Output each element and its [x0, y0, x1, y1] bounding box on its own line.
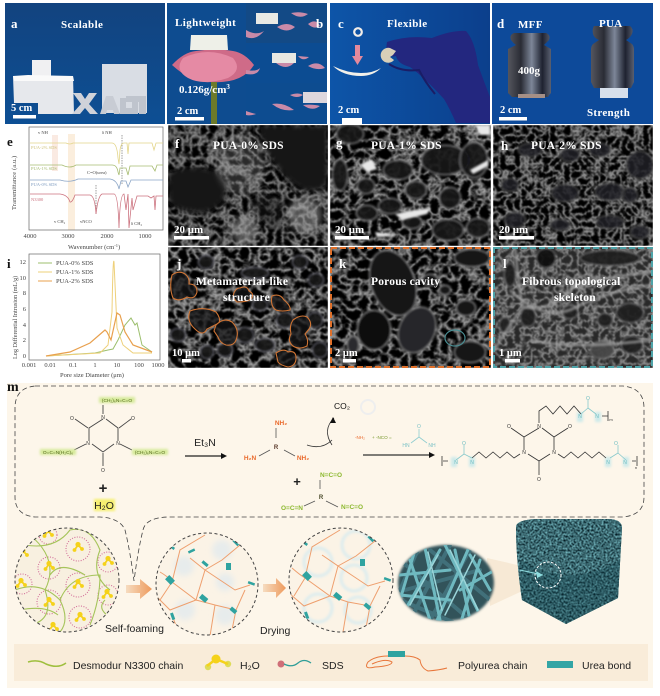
urea formula [355, 424, 436, 458]
peak annotations: v CH₂ [54, 219, 66, 224]
axis ticks: 6 [23, 306, 27, 313]
polymer product: N [606, 460, 610, 466]
panel a: scalable foams photo [5, 3, 165, 124]
labels: g [336, 135, 343, 150]
axis title and ticks: Transmittance (a.u.) [11, 156, 18, 210]
axis ticks [20, 259, 27, 360]
axis ticks: 8 [23, 290, 26, 297]
legend bar [14, 644, 648, 681]
panel h: SEM PUA-2%: PUA-2% SDS [531, 140, 602, 152]
polymer product: N [522, 450, 526, 456]
panel f: SEM PUA-0%: PUA-0% SDS [213, 140, 284, 152]
amine molecule: H₂N [244, 455, 256, 462]
chart e: FTIR spectra: e [7, 134, 13, 149]
axis ticks: 0 [23, 353, 26, 360]
axis ticks: 4 [23, 322, 27, 329]
label and title: a [11, 16, 18, 31]
chart i: pore size distribution: 0.1 [69, 362, 77, 369]
labels: f [175, 136, 180, 151]
chart i: pore size distribution: PUA-0% SDS [56, 260, 94, 267]
isocyanate molecule [281, 472, 363, 512]
panel c: flexible foam: 2 cm [338, 105, 360, 116]
CO2 release [307, 400, 375, 447]
glove hand [386, 31, 490, 123]
urea formula: NH [428, 443, 436, 449]
panel l frame [494, 248, 652, 367]
orange highlighted cells [171, 272, 311, 367]
chart i: pore size distribution: PUA-1% SDS [56, 269, 94, 276]
polymer product: O [507, 424, 511, 430]
plus and water: + [99, 480, 108, 497]
flower [172, 50, 254, 82]
legend bar: Desmodur N3300 chain [73, 660, 183, 672]
axis ticks: 2 [23, 337, 26, 344]
urea formula: HN [402, 443, 410, 449]
panel g: SEM PUA-1%: PUA-1% SDS [371, 140, 442, 152]
chart e: FTIR spectra [7, 127, 163, 251]
panel c: flexible foam: Flexible [387, 18, 427, 30]
chart i: pore size distribution: 100 [134, 362, 144, 369]
panel g: SEM PUA-1% [330, 124, 491, 246]
dashed outline [15, 386, 644, 581]
panel b: lightweight on flower [167, 3, 327, 124]
molecule: N3300: (CH₂)₆N=C=O [135, 450, 165, 456]
labels: c [338, 16, 344, 31]
polymer product: N [623, 460, 627, 466]
circle 2: foam [156, 533, 258, 636]
polymer product: N [552, 450, 556, 456]
chart e: FTIR spectra: Wavenumber (cm [68, 244, 114, 251]
polymer product: N [537, 424, 541, 430]
panel j: metamaterial-like structure: structure [223, 292, 270, 304]
chart i: pore size distribution: Log Differential Intrusion (mL/g) [12, 276, 19, 359]
chart e: FTIR spectra: -1 [114, 243, 118, 248]
panel b: lightweight on flower: 2 cm [177, 106, 199, 117]
panel k: porous cavity: Porous cavity [371, 276, 440, 288]
molecule: N3300: (CH₂)₆N=C=O [102, 398, 132, 404]
circle 3: dried foam [289, 528, 393, 632]
urea formula: -NH₂ [355, 435, 365, 440]
polymer product: N [470, 460, 474, 466]
panel l: fibrous topological skeleton [493, 247, 653, 368]
magnifying cones [487, 558, 548, 606]
panel l: fibrous topological skeleton: 1 μm [499, 348, 522, 359]
panel h: SEM PUA-2% [493, 125, 654, 246]
panel d: strength weights: Strength [587, 107, 630, 119]
panel h: SEM PUA-2%: 20 μm [499, 224, 528, 236]
molecule: N3300: O [70, 416, 74, 422]
chart e: FTIR spectra: 3000 [62, 233, 74, 240]
arrow Et3N: Et₃N [194, 437, 216, 449]
chart i: pore size distribution: 1 [93, 362, 97, 369]
panel d: strength weights: 2 cm [500, 105, 522, 116]
panel k: porous cavity: 2 μm [335, 348, 358, 359]
isocyanate molecule: N=C=O [320, 472, 342, 479]
polymer product: N [595, 414, 599, 420]
polymer product: N [454, 460, 458, 466]
isocyanate molecule: O=C=N [281, 505, 303, 512]
panel l: fibrous topological skeleton: skeleton [554, 292, 596, 304]
panel a: scalable foams photo: 5 cm [11, 103, 33, 114]
chart i: pore size distribution: PUA-2% SDS [56, 278, 94, 285]
peak annotations [31, 130, 142, 226]
peak annotations: PUA-2% SDS [31, 145, 57, 150]
foam blocks [13, 60, 147, 114]
label m: m [7, 380, 19, 395]
polymer product: O [614, 441, 618, 447]
chart i: pore size distribution: Pore size Diameter (μm) [60, 372, 124, 379]
legend [38, 262, 52, 264]
panel b: lightweight on flower: b [316, 16, 323, 31]
peak annotations: C=O(urea) [87, 170, 107, 175]
panel d: strength weights: MFF [518, 19, 543, 31]
molecule: N3300: N [116, 441, 120, 447]
molecule: N3300: O [131, 416, 135, 422]
axis ticks: 10 [20, 275, 26, 282]
labels: h [501, 138, 509, 153]
panel m: reaction and process schematic: Drying [260, 625, 291, 637]
legend bar: Polyurea chain [458, 660, 528, 672]
peak annotations: N3300 [31, 197, 44, 202]
amine molecule: NH₂ [275, 420, 287, 427]
urea formula: O [417, 424, 421, 430]
highlight bands [68, 134, 75, 230]
peak annotations: δ NH [102, 130, 112, 135]
panel d: strength weights: PUA [599, 18, 623, 30]
molecule: N3300: O=C=N(H₂C)₆ [43, 450, 73, 456]
panel k frame [331, 248, 490, 367]
molecule: N3300 [40, 397, 168, 474]
molecule: N3300: N [101, 415, 105, 421]
panel m: reaction and process schematic: H₂O [94, 500, 114, 512]
chart i: pore size distribution: 1000 [152, 362, 164, 369]
isocyanate molecule: + [293, 474, 301, 489]
arrow: drying [263, 578, 286, 598]
chart i: pore size distribution [7, 254, 164, 379]
polymer product: O [568, 424, 572, 430]
chart i: pore size distribution: 0.01 [44, 362, 56, 369]
foam cube [516, 519, 622, 624]
labels: Lightweight [175, 17, 236, 29]
legend bar: SDS [322, 660, 344, 672]
molecule: N3300: N [86, 441, 90, 447]
chart i: pore size distribution: 0.001 [22, 362, 36, 369]
panel j: metamaterial-like structure: Metamaterial-like [196, 276, 288, 288]
polymer product: m [609, 417, 613, 422]
peak annotations: PUA-1% SDS [31, 166, 57, 171]
chart e: FTIR spectra: ) [118, 244, 120, 251]
polymer product: N [578, 414, 582, 420]
arrow Et3N [185, 437, 227, 459]
labels: k [339, 256, 347, 271]
process labels: Self-foaming [105, 623, 164, 635]
panel j: metamaterial-like structure: 10 μm [172, 348, 200, 359]
weight on PUA [591, 26, 634, 88]
polymer product [442, 396, 637, 483]
axis ticks: 12 [20, 259, 26, 266]
panel b: lightweight on flower: 0.126g/cm [179, 84, 226, 96]
peak annotations: PUA-0% SDS [31, 182, 57, 187]
isocyanate molecule: R [319, 495, 324, 501]
peak annotations: vNCO [80, 219, 93, 224]
CO2 release: CO₂ [334, 401, 350, 411]
panel b: lightweight on flower: 3 [226, 83, 230, 91]
urea formula: + -NCO = [372, 435, 392, 440]
labels: j [176, 256, 181, 271]
peak annotations: v NH [38, 130, 49, 135]
peak annotations: δ CH₂ [131, 221, 142, 226]
panel c: flexible foam [330, 3, 490, 124]
molecule: N3300: O [101, 468, 105, 474]
chart e: FTIR spectra: 2000 [100, 233, 114, 240]
amine molecule: R [274, 445, 279, 451]
circle 1: precursor emulsion [12, 526, 119, 632]
chart i: pore size distribution: i [7, 256, 11, 271]
panel m: reaction and process schematic [7, 380, 653, 688]
panel f: SEM PUA-0% [168, 125, 328, 246]
polymer product: n [635, 465, 637, 470]
fiber ball zoom [398, 545, 495, 625]
legend bar: H₂O [240, 660, 260, 672]
panel g: SEM PUA-1%: 20 μm [335, 224, 364, 236]
isocyanate molecule: N=C=O [341, 504, 363, 511]
legend bar: Urea bond [582, 660, 631, 672]
panel d: strength weights: 400g [518, 65, 540, 77]
panel f: SEM PUA-0%: 20 μm [174, 224, 203, 236]
petals and blocks [256, 13, 278, 24]
arrow: self-foaming [126, 579, 152, 599]
polymer product: O [537, 477, 541, 483]
labels: l [503, 256, 507, 271]
panel l: fibrous topological skeleton: Fibrous topological [522, 276, 620, 288]
panel a: scalable foams photo: Scalable [61, 19, 103, 31]
bent foam sample [381, 48, 396, 63]
amine molecule [244, 420, 309, 462]
panel d: strength weights [492, 3, 653, 124]
panel k: porous cavity [330, 244, 491, 368]
polymer product: O [462, 441, 466, 447]
chart e: FTIR spectra: 4000 [24, 233, 36, 240]
chart e: FTIR spectra: 1000 [138, 233, 152, 240]
weight on MFF [508, 33, 551, 97]
polymer product: O [586, 396, 590, 402]
panel j: metamaterial-like structure [168, 247, 328, 368]
amine molecule: NH₂ [297, 455, 309, 462]
labels: d [497, 16, 505, 31]
chart i: pore size distribution: 10 [114, 362, 120, 369]
